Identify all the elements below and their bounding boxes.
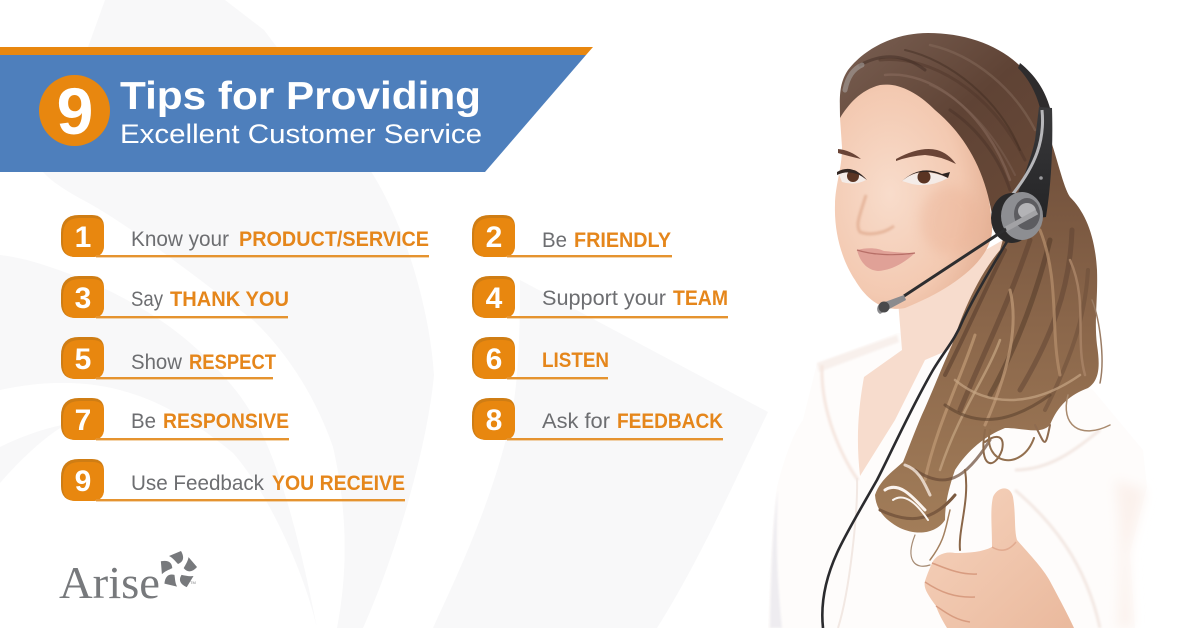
tip 5 bbox=[61, 337, 276, 379]
tip 4: TEAM bbox=[673, 287, 728, 310]
tip 1 bbox=[61, 215, 429, 257]
tip 7: RESPONSIVE bbox=[163, 410, 289, 433]
lips bbox=[857, 248, 915, 271]
tip 8: 8 bbox=[486, 404, 502, 437]
heading line 1: Tips for Providing bbox=[120, 75, 481, 118]
cheek shade bbox=[920, 186, 980, 254]
number circle: 9 bbox=[57, 74, 93, 148]
photo: woman with headset giving thumbs up bbox=[768, 33, 1147, 628]
Arise logo bbox=[59, 551, 198, 608]
tip 1: Know your bbox=[131, 228, 229, 251]
tip 3: THANK YOU bbox=[170, 288, 289, 311]
tip 4: 4 bbox=[486, 282, 503, 315]
eyebrows bbox=[838, 149, 861, 159]
tip 6: 6 bbox=[486, 343, 502, 376]
banner blue panel bbox=[0, 55, 586, 172]
icon: pinwheel bbox=[157, 551, 198, 591]
eyes bbox=[838, 170, 866, 184]
nose shadow bbox=[858, 195, 894, 234]
neck and chest bbox=[858, 240, 1003, 476]
microphone boom bbox=[904, 212, 1037, 296]
hair top strands bbox=[845, 45, 1035, 190]
ear cup bbox=[991, 193, 1033, 243]
headset bbox=[822, 63, 1052, 628]
headband bbox=[1018, 63, 1050, 108]
tip 3: Say bbox=[131, 288, 163, 311]
Arise logo: TM bbox=[190, 580, 196, 585]
Arise logo: Arise bbox=[59, 557, 160, 608]
hair strands bbox=[880, 230, 1110, 566]
hair top bbox=[840, 33, 1052, 215]
microphone capsule bbox=[877, 295, 906, 314]
banner orange strip bbox=[0, 47, 593, 55]
background pinwheel bbox=[0, 0, 768, 628]
hand with thumb up bbox=[925, 488, 1074, 628]
tip 9: YOU RECEIVE bbox=[272, 472, 405, 495]
ear arm bbox=[1010, 107, 1052, 222]
tip 2: 2 bbox=[486, 221, 502, 254]
tip 3 bbox=[61, 276, 289, 318]
face bbox=[835, 79, 992, 309]
tip 1: 1 bbox=[75, 221, 91, 254]
tip 5: 5 bbox=[75, 343, 91, 376]
tip 9 bbox=[61, 459, 405, 501]
tip 5: Show bbox=[131, 351, 183, 374]
tip 5: RESPECT bbox=[189, 351, 276, 374]
tip 4 bbox=[472, 276, 728, 318]
tip 7: 7 bbox=[75, 404, 91, 437]
tip 9: 9 bbox=[75, 465, 91, 498]
tip 2 bbox=[472, 215, 672, 257]
hair back bbox=[875, 110, 1099, 533]
tip 8: FEEDBACK bbox=[617, 410, 723, 433]
tip 7: Be bbox=[131, 410, 156, 433]
white shirt bbox=[768, 333, 1147, 628]
tip 8 bbox=[472, 398, 723, 440]
number circle bbox=[39, 74, 110, 148]
heading line 2: Excellent Customer Service bbox=[120, 119, 482, 149]
tip 7 bbox=[61, 398, 289, 440]
tip 2: FRIENDLY bbox=[574, 229, 671, 252]
tip 3: 3 bbox=[75, 282, 91, 315]
tip 8: Ask for bbox=[542, 410, 610, 433]
tip 2: Be bbox=[542, 229, 567, 252]
tip 6 bbox=[472, 337, 609, 379]
tip 6: LISTEN bbox=[542, 349, 609, 372]
tip 4: Support your bbox=[542, 287, 666, 310]
tip 9: Use Feedback bbox=[131, 472, 264, 495]
tip 1: PRODUCT/SERVICE bbox=[239, 228, 429, 251]
cable bbox=[822, 240, 1008, 628]
title banner bbox=[0, 47, 593, 172]
facial features bbox=[837, 149, 980, 271]
